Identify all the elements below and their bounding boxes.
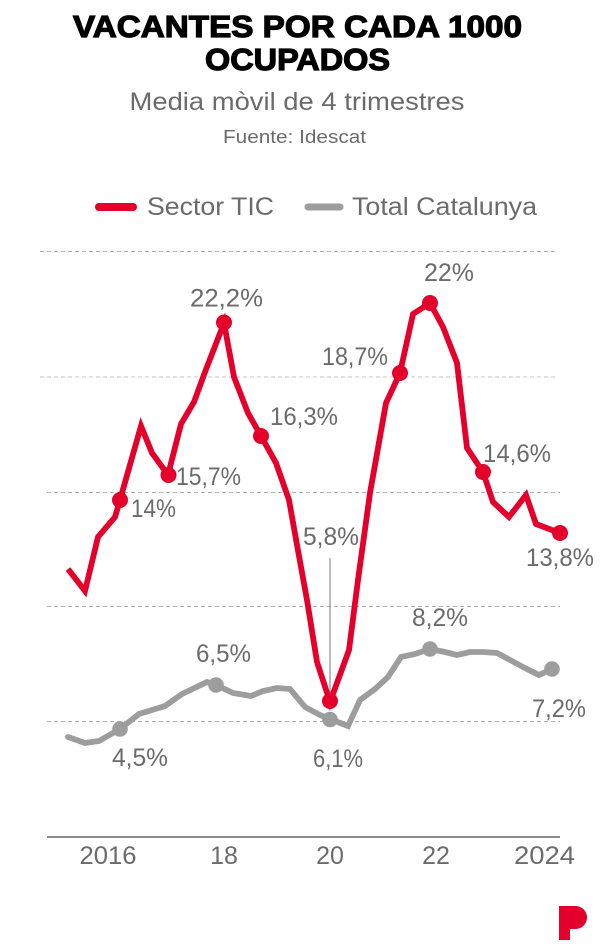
grid lines [40,252,560,722]
x axis: 2016 [80,842,136,870]
data labels: 22,2% [190,284,263,312]
source: Fuente: Idescat [223,127,366,147]
data labels: 18,7% [322,343,388,371]
data labels: 16,3% [270,403,338,431]
data labels: 8,2% [412,604,468,632]
legend: Total Catalunya [352,193,537,221]
x axis: 18 [210,842,238,870]
title: OCUPADOS [205,42,390,77]
x axis [47,837,575,870]
x axis: 20 [316,842,344,870]
title [73,9,522,77]
icon: logo P [559,906,587,940]
x axis: 2024 [514,842,575,870]
data labels: 15,7% [176,463,241,491]
data labels: 22% [424,259,474,287]
data labels: 4,5% [112,744,168,772]
legend: Sector TIC [147,193,274,221]
title: VACANTES POR CADA 1000 [73,9,522,44]
legend [99,193,537,221]
line: Sector TIC [68,295,568,709]
line: Total Catalunya [68,641,560,743]
data labels [112,259,594,773]
data labels: 13,8% [526,544,594,572]
subtitle: Media mòvil de 4 trimestres [130,88,464,116]
x axis: 22 [422,842,450,870]
leader line [329,558,331,694]
data labels: 6,5% [196,640,251,668]
data labels: 7,2% [532,695,586,723]
data labels: 6,1% [313,745,363,773]
data labels: 14,6% [483,440,551,468]
data labels: 5,8% [303,523,359,551]
data labels: 14% [131,495,176,523]
